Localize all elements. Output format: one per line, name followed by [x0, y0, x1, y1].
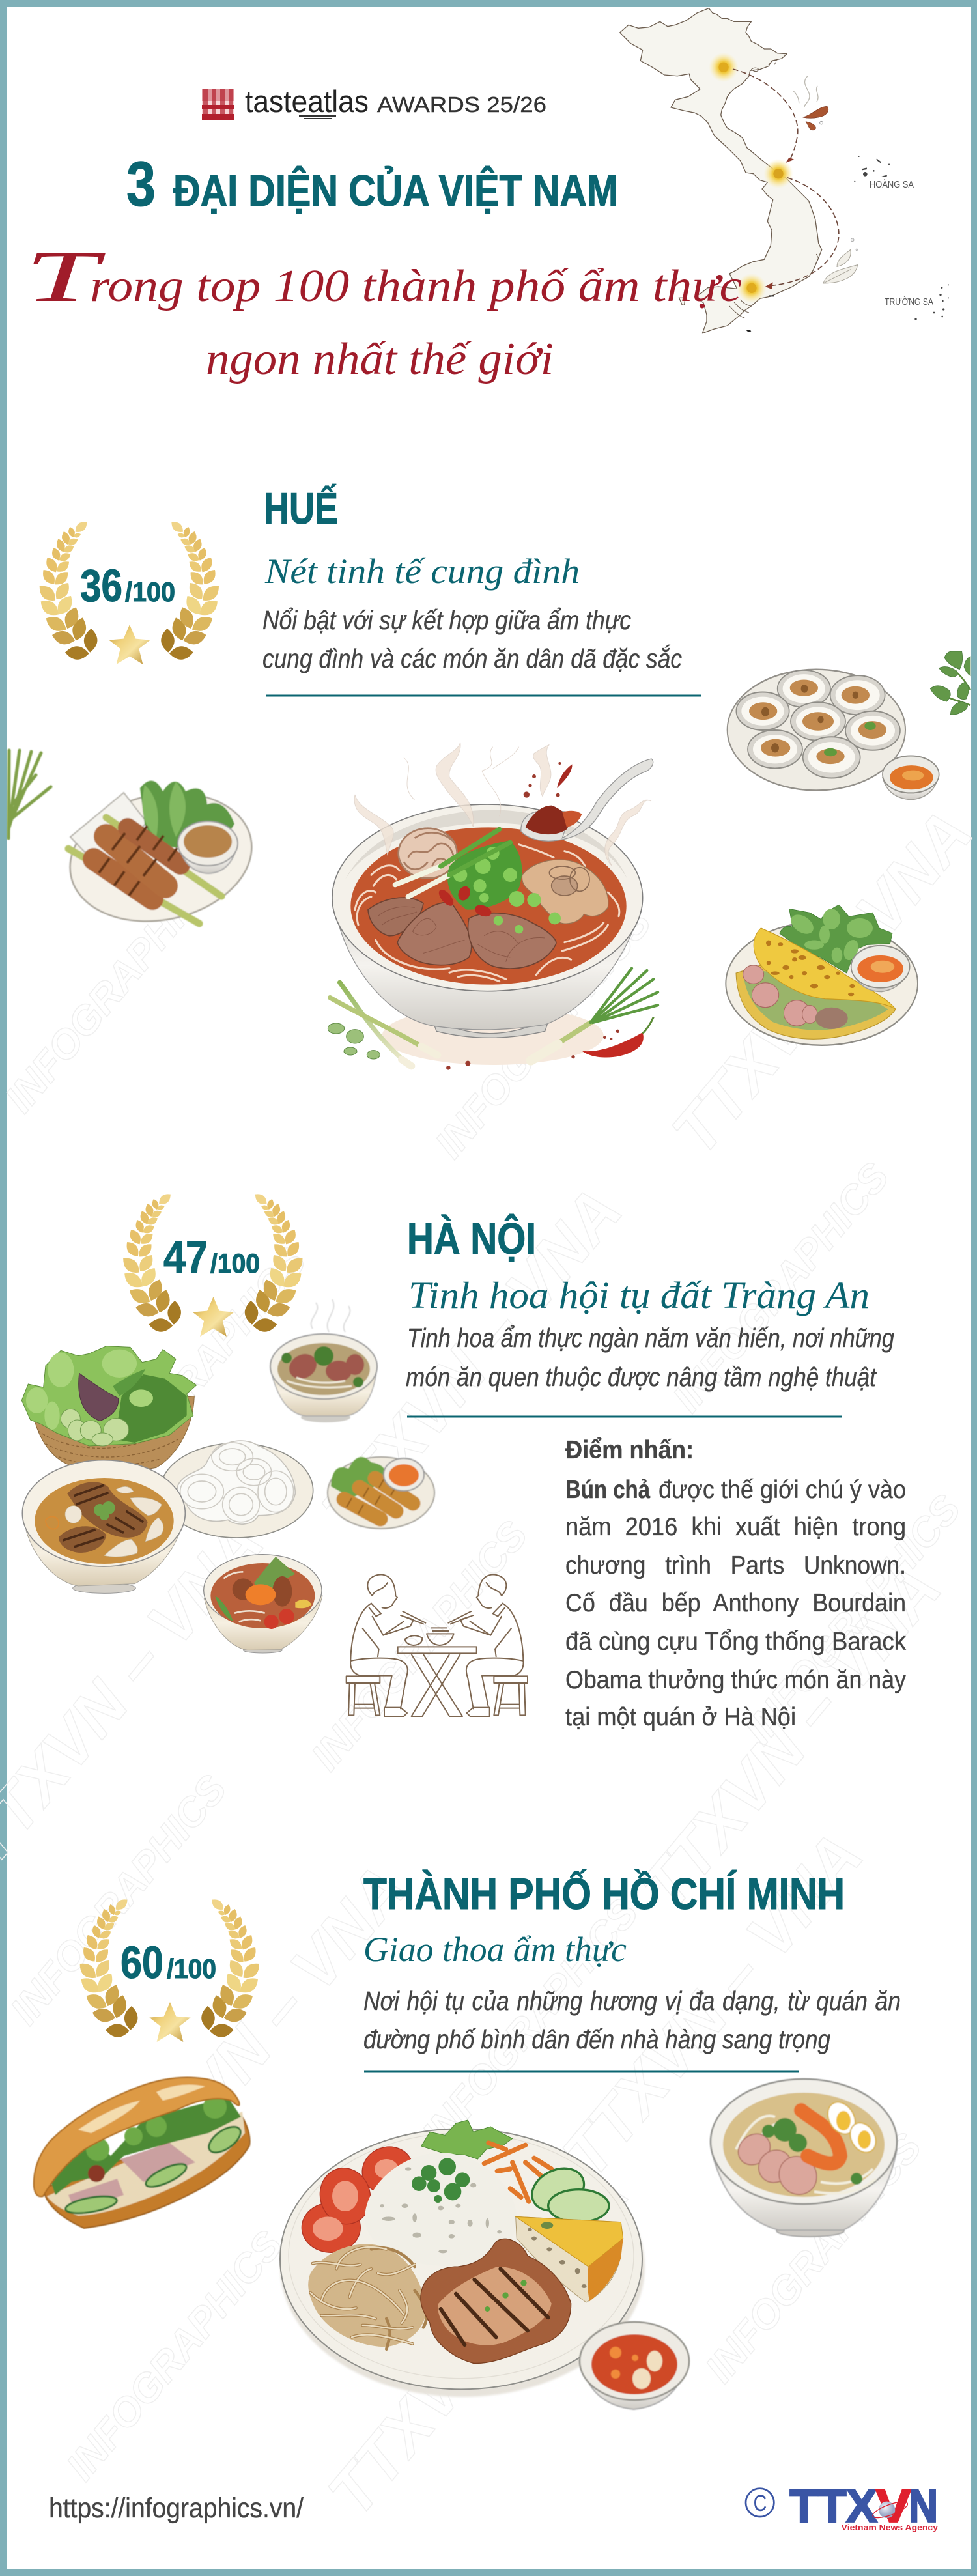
title: ĐẠI DIỆN CỦA VIỆT NAM: [173, 165, 618, 216]
icon: two diners at a table: [347, 1574, 528, 1716]
Huế description: Nổi bật với sự kết hợp giữa ẩm thực: [262, 605, 631, 635]
TP.HCM description: đường phố bình dân đến nhà hàng sang trọng: [363, 2024, 830, 2054]
icon: bún riêu bowl: [204, 1555, 322, 1653]
tasteatlas logo: AWARDS 25/26: [377, 92, 546, 117]
TTXVN logo: TTX: [790, 2480, 877, 2532]
TTXVN logo: V: [876, 2480, 911, 2532]
TTXVN logo: Vietnam News Agency: [842, 2523, 938, 2532]
script subtitle: ngon nhất thế giới: [206, 334, 554, 384]
Hà Nội heading: HÀ NỘI: [407, 1213, 536, 1264]
icon: bánh bèo plate: [728, 670, 939, 800]
map label: Hoàng Sa: HOÀNG SA: [870, 179, 914, 190]
icon: bánh xèo plate: [726, 905, 918, 1045]
icon: bánh mì: [34, 2077, 250, 2228]
TP.HCM rank badge: 60: [120, 1937, 163, 1988]
icon: herb basket: [21, 1346, 197, 1471]
icon: bún bò main bowl: [328, 743, 658, 1070]
Hà Nội rank badge: [119, 1191, 307, 1337]
TP.HCM rank badge: /100: [167, 1953, 216, 1984]
callout: Điểm nhấn: tại một quán ở Hà Nội: [565, 1703, 796, 1731]
Huế rank badge: /100: [125, 576, 175, 607]
icon: grilled lemongrass skewers: [58, 777, 264, 937]
icon: phở bowl: [270, 1299, 377, 1422]
callout: Điểm nhấn: Cố đầu bếp Anthony Bourdain: [565, 1589, 906, 1617]
text: TTXVN – VNA: [92, 1852, 421, 2223]
script subtitle: T: [25, 236, 106, 317]
Huế heading: HUẾ: [264, 483, 338, 533]
Huế rank badge: 36: [80, 560, 122, 611]
icon: nem rán plate: [328, 1457, 434, 1529]
Hà Nội description: [406, 1323, 894, 1392]
Hà Nội section: [21, 1191, 906, 1731]
text: INFOGRAPHICS: [427, 901, 660, 1167]
text: INFOGRAPHICS: [664, 1155, 898, 1421]
TP.HCM tagline: Giao thoa ẩm thực: [363, 1930, 627, 1969]
TTXVN logo: [746, 2480, 938, 2532]
icon: cơm tấm plate: [280, 2120, 645, 2397]
TTXVN logo: N: [909, 2480, 938, 2532]
icon: nước chấm bowl: [580, 2322, 689, 2409]
header section: [25, 8, 949, 384]
icon: rice noodle plate: [160, 1441, 313, 1538]
text: TTXVN – VNA: [314, 2158, 642, 2529]
Huế section: [8, 483, 970, 1070]
TP.HCM rank badge: [76, 1897, 263, 2042]
text: TTXVN – VNA: [548, 1819, 877, 2190]
text: INFOGRAPHICS: [303, 1513, 537, 1779]
Huế tagline: Nét tinh tế cung đình: [264, 552, 580, 591]
Hà Nội description: Tinh hoa ẩm thực ngàn năm văn hiến, nơi những: [407, 1323, 894, 1353]
callout: Điểm nhấn: Obama thưởng thức món ăn này: [565, 1666, 906, 1694]
TTXVN logo: C: [754, 2491, 767, 2516]
icon: bún chả bowl: [22, 1460, 185, 1593]
icon: hủ tiếu bowl: [711, 2079, 897, 2237]
Hà Nội tagline: Tinh hoa hội tụ đất Tràng An: [408, 1274, 870, 1316]
vietnam map: [620, 8, 949, 333]
text: TTXVN – VNA: [627, 1552, 955, 1923]
callout: Điểm nhấn: năm 2016 khi xuất hiện trong: [565, 1513, 906, 1541]
tasteatlas logo: tasteatlas: [245, 84, 369, 119]
text: TTXVN – VNA: [307, 1174, 636, 1546]
text: INFOGRAPHICS: [736, 1487, 970, 1753]
Huế rank badge: [36, 519, 223, 664]
text: TTXVN – VNA: [658, 797, 977, 1168]
title: [126, 149, 618, 219]
script subtitle: [25, 236, 742, 384]
text: INFOGRAPHICS: [81, 1239, 315, 1505]
callout: Điểm nhấn: đã cùng cựu Tổng thống Barack: [565, 1628, 906, 1656]
tasteatlas logo: [202, 84, 546, 120]
icon: lemongrass at left edge: [8, 750, 51, 838]
TP.HCM heading: THÀNH PHỐ HỒ CHÍ MINH: [363, 1869, 845, 1919]
callout: Điểm nhấn: Bún chả: [565, 1476, 650, 1504]
Huế description: [262, 605, 682, 673]
Huế description: cung đình và các món ăn dân dã đặc sắc: [262, 644, 682, 673]
title: 3: [126, 149, 156, 219]
Hà Nội rank badge: 47: [163, 1232, 208, 1282]
text: INFOGRAPHICS: [697, 2125, 931, 2391]
callout: Điểm nhấn: chương trình Parts Unknown.: [565, 1551, 906, 1579]
TP.HCM description: [363, 1986, 901, 2054]
icon: herb sprig at right edge: [930, 651, 970, 715]
Thành phố Hồ Chí Minh section: [34, 1869, 901, 2409]
text: INFOGRAPHICS: [0, 855, 231, 1121]
Hà Nội rank badge: /100: [210, 1248, 260, 1279]
callout: Điểm nhấn: Điểm nhấn:: [565, 1436, 694, 1464]
text: INFOGRAPHICS: [58, 2223, 292, 2489]
website address: https://infographics.vn/: [49, 2493, 304, 2524]
callout: Điểm nhấn: được thế giới chú ý vào: [658, 1476, 906, 1504]
callout: Điểm nhấn: [565, 1436, 906, 1731]
script subtitle: rong top 100 thành phố ẩm thực: [90, 261, 742, 311]
Hà Nội description: món ăn quen thuộc được nâng tầm nghệ thuật: [406, 1362, 877, 1392]
text: INFOGRAPHICS: [414, 1891, 647, 2157]
map label: Trường Sa: TRƯỜNG SA: [885, 296, 933, 307]
text: INFOGRAPHICS: [2, 1767, 236, 2033]
TP.HCM description: Nơi hội tụ của những hương vị đa dạng, từ quán ăn: [363, 1986, 901, 2016]
